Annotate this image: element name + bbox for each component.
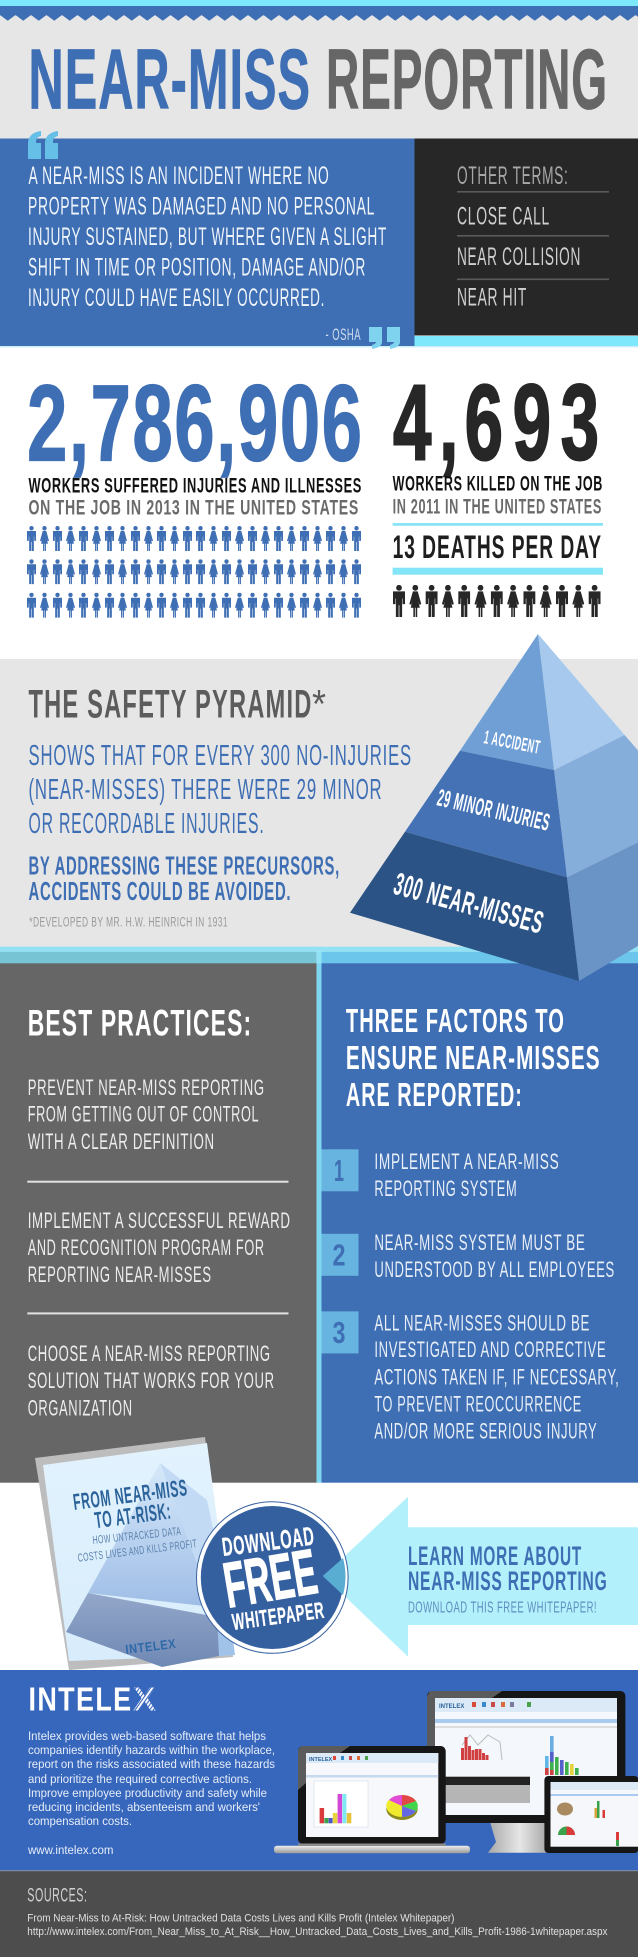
device: desktop monitor: INTELEX [439,1704,464,1710]
device: laptop [274,1746,470,1853]
three factors heading [346,1003,601,1114]
footnote: *DEVELOPED BY MR. H.W. HEINRICH IN 1931 [29,915,228,930]
panel: company footer [0,1670,638,1871]
company description: report on the risks associated with these hazards [28,1757,275,1771]
logo: Intelex: INTELE [28,1681,132,1718]
device: desktop monitor [427,1691,625,1853]
factor 2 [322,1230,615,1282]
quote text: INJURY COULD HAVE EASILY OCCURRED. [28,284,325,312]
panel: other terms [414,138,638,346]
company description: compensation costs. [28,1814,132,1828]
best practices heading: BEST PRACTICES: [28,1002,252,1044]
panel: best practices [0,963,317,1483]
chart: safety pyramid [350,634,638,981]
factor 3: 3 [332,1315,346,1350]
arrow: points to download badge [324,1497,638,1657]
three factors heading: ARE REPORTED: [346,1077,523,1114]
pictogram row 2 [27,559,361,584]
number: 4,693: 4,693 [393,363,599,483]
panel: safety pyramid text [0,659,638,947]
company description [28,1729,275,1828]
panel: header [0,0,638,139]
pictogram row 1 [27,526,361,551]
pyramid description: (NEAR-MISSES) THERE WERE 29 MINOR [28,774,382,806]
source title: From Near-Miss to At-Risk: How Untracked Data Costs Lives and Kills Profit (Intelex Whitepaper) [27,1913,455,1925]
panel: deaths statistic [393,363,603,617]
company description: companies identify hazards within the workplace, [28,1743,275,1757]
pyramid description: OR RECORDABLE INJURIES. [28,808,264,840]
device: laptop: INTELEX [309,1757,333,1763]
booklet subtitle line 2: COSTS LIVES AND KILLS PROFIT [77,1538,198,1565]
download badge [196,1502,348,1653]
factor 1: 1 [334,1153,344,1188]
pyramid heading: THE SAFETY PYRAMID [28,682,312,726]
company description: reducing incidents, absenteeism and workers' [28,1800,260,1814]
booklet logo: INTELEX [125,1636,177,1657]
company description: and prioritize the required corrective actions. [28,1772,252,1786]
logo: Intelex: X [133,1681,156,1718]
whitepaper booklet [35,1437,235,1670]
heading asterisk: * [312,682,326,726]
panel: sources [0,1870,638,1957]
sources heading: SOURCES: [27,1886,88,1907]
company description: Improve employee productivity and safety while [28,1786,267,1800]
colour bands under the pyramid section [0,947,638,964]
booklet subtitle line 1: HOW UNTRACKED DATA [92,1526,182,1547]
pyramid conclusion: ACCIDENTS COULD BE AVOIDED. [28,878,291,906]
term: near hit: NEAR HIT [457,284,527,312]
pyramid conclusion: BY ADDRESSING THESE PRECURSORS, [28,852,340,880]
quote text [28,162,387,312]
factor 2: 2 [332,1238,346,1272]
term: close call: CLOSE CALL [457,203,550,231]
practice 3: ORGANIZATION [28,1396,133,1420]
pyramid description [28,740,412,840]
panel: injuries statistic [27,363,364,618]
device: tablet [544,1776,638,1853]
icon: closing quote marks [369,327,400,349]
factor 1 [322,1149,559,1201]
quote attribution: - OSHA [326,325,361,344]
pictogram row 3 [27,593,361,618]
practice 3: CHOOSE A NEAR-MISS REPORTING [28,1341,271,1366]
practice 3: SOLUTION THAT WORKS FOR YOUR [28,1368,275,1393]
divider between panels [317,963,322,1483]
badge text: download: DOWNLOAD [220,1521,316,1562]
chart: safety pyramid: 1 ACCIDENT [482,727,542,759]
pyramid conclusion [28,852,340,906]
panel: definition quote [0,131,638,349]
factor 1: REPORTING SYSTEM [374,1176,517,1201]
call to action [408,1541,608,1617]
title: NEAR-MISS [28,32,311,127]
injuries sub-caption: ON THE JOB IN 2013 IN THE UNITED STATES [28,496,359,519]
practice 2 [28,1208,291,1287]
practice 1: PREVENT NEAR-MISS REPORTING [28,1075,265,1100]
pictogram: deaths row [393,585,601,617]
quote text: SHIFT IN TIME OR POSITION, DAMAGE AND/OR [28,253,366,281]
badge text: whitepaper: WHITEPAPER [230,1597,326,1635]
booklet title: FROM NEAR-MISS [72,1474,189,1515]
factor 3 [322,1310,619,1443]
practice 2: AND RECOGNITION PROGRAM FOR [28,1235,265,1260]
practice 2: IMPLEMENT A SUCCESSFUL REWARD [28,1208,291,1233]
website: www.intelex.com [27,1843,113,1857]
practice 1: WITH A CLEAR DEFINITION [28,1129,215,1154]
injuries caption: WORKERS SUFFERED INJURIES AND ILLNESSES [28,475,362,498]
practice 1 [28,1075,265,1154]
booklet title line 2: TO AT-RISK: [93,1498,173,1533]
icon: opening quote marks [28,131,58,159]
practice 2: REPORTING NEAR-MISSES [28,1262,212,1287]
badge text: free: FREE [218,1535,322,1622]
practice 3 [28,1341,275,1420]
panel: three factors [322,963,638,1483]
company description: Intelex provides web-based software that helps [28,1729,266,1743]
quote text: A NEAR-MISS IS AN INCIDENT WHERE NO [28,162,330,190]
practice 1: FROM GETTING OUT OF CONTROL [28,1102,259,1127]
quote text: PROPERTY WAS DAMAGED AND NO PERSONAL [28,192,375,220]
number: 2,786,906: 2,786,906 [27,363,364,485]
